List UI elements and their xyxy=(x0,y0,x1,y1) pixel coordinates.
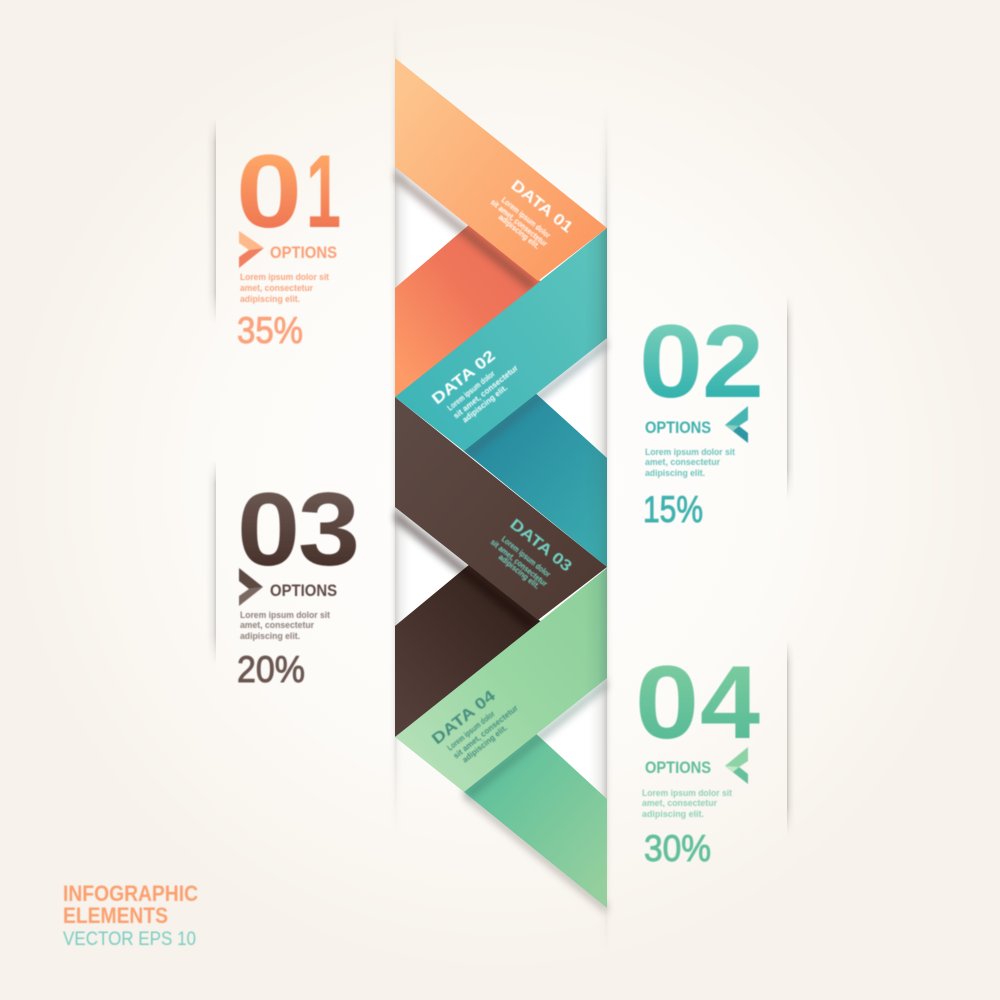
description text: adipiscing elit. xyxy=(642,808,704,819)
ribbon: brown xyxy=(395,397,607,620)
description text: Lorem ipsum dolor sit xyxy=(645,446,735,457)
number 01: 0 xyxy=(236,134,302,250)
ribbon label: data 03: DATA 03 xyxy=(506,516,575,576)
ribbon label: data 04: sit amet, consectetur xyxy=(452,703,520,761)
icon: chevron 04 xyxy=(725,747,748,784)
number 04: 4 xyxy=(700,645,760,761)
number 02: 2 xyxy=(702,304,764,420)
ribbon: dark brown fold xyxy=(395,564,545,737)
description text xyxy=(240,271,329,304)
white triangles between ribbons xyxy=(395,160,607,805)
description text xyxy=(240,609,330,641)
ribbon label: data 01: Lorem ipsum dolor xyxy=(500,196,553,240)
description text: adipiscing elit. xyxy=(240,293,300,304)
label: options: OPTIONS xyxy=(270,243,337,262)
number 04 xyxy=(635,645,760,761)
description text xyxy=(645,446,735,478)
ribbon label: data 01: DATA 01 xyxy=(507,177,576,237)
title: infographic elements xyxy=(63,881,198,950)
ribbon: light green xyxy=(395,568,607,792)
description text: Lorem ipsum dolor sit xyxy=(642,787,732,798)
ribbon label: data 04 xyxy=(429,687,520,765)
description text: amet, consectetur xyxy=(642,797,717,808)
number 03: 0 xyxy=(237,472,300,588)
ribbon label: data 03: Lorem ipsum dolor xyxy=(500,535,553,579)
panel: option 01 xyxy=(236,134,341,351)
number 01: 1 xyxy=(306,134,341,250)
ribbon label: data 01 xyxy=(489,177,576,251)
ribbon: dark green fold xyxy=(455,730,607,914)
icon: chevron 01 xyxy=(239,231,264,268)
panel: option 04 xyxy=(635,645,760,869)
number 03: 3 xyxy=(298,472,360,588)
ribbon edge shading xyxy=(585,228,607,696)
icon: chevron 02 xyxy=(725,406,748,443)
title: infographic elements: VECTOR EPS 10 xyxy=(63,928,196,950)
ribbon label: data 01: sit amet, consectetur xyxy=(489,198,550,249)
percentage: 30% xyxy=(644,828,711,869)
title: infographic elements: INFOGRAPHIC xyxy=(63,881,198,906)
ribbon label: data 03: adipiscing elit. xyxy=(497,553,541,591)
title: infographic elements: ELEMENTS xyxy=(63,903,168,928)
number 02: 0 xyxy=(639,304,703,420)
description text: amet, consectetur xyxy=(240,282,313,293)
panel: paper fold shadows xyxy=(206,15,795,955)
ribbon label: data 02 xyxy=(429,347,520,425)
description text: Lorem ipsum dolor sit xyxy=(240,609,330,620)
description text: adipiscing elit. xyxy=(240,630,300,641)
icon: chevron 03 xyxy=(239,568,263,606)
ribbon label: data 04: adipiscing elit. xyxy=(461,723,509,765)
label: options: OPTIONS xyxy=(645,418,711,437)
ribbon: teal xyxy=(395,228,607,451)
ribbon label: data 04: Lorem ipsum dolor xyxy=(446,709,497,753)
description text: amet, consectetur xyxy=(645,456,720,467)
label: options: OPTIONS xyxy=(270,581,337,600)
ribbon cast shadows xyxy=(395,170,607,799)
panel: option 03 xyxy=(237,472,360,690)
description text: amet, consectetur xyxy=(240,619,314,630)
ribbon label: data 03 xyxy=(489,516,575,591)
ribbon: dark teal fold xyxy=(455,390,607,567)
number 02 xyxy=(639,304,764,420)
percentage: 35% xyxy=(237,310,303,351)
percentage: 20% xyxy=(237,649,305,690)
description text: adipiscing elit. xyxy=(645,467,705,478)
ribbon: orange xyxy=(395,58,607,281)
ribbon label: data 02: DATA 02 xyxy=(429,347,499,408)
ribbon label: data 04: DATA 04 xyxy=(429,687,499,748)
ribbon label: data 02: adipiscing elit. xyxy=(461,383,509,425)
number 04: 0 xyxy=(635,645,699,761)
panel: option 02 xyxy=(639,304,764,530)
ribbon label: data 01: adipiscing elit. xyxy=(497,213,541,251)
description text: Lorem ipsum dolor sit xyxy=(240,271,329,282)
ribbon label: data 03: sit amet, consectetur xyxy=(489,538,550,589)
label: options: OPTIONS xyxy=(645,758,711,777)
panel: ribbon stack xyxy=(395,58,607,914)
ribbon label: data 02: sit amet, consectetur xyxy=(452,363,520,421)
number 01 xyxy=(236,134,341,250)
ribbon: red fold xyxy=(395,224,545,397)
percentage: 15% xyxy=(643,489,703,530)
ribbon label: data 02: Lorem ipsum dolor xyxy=(446,369,497,413)
number 03 xyxy=(237,472,360,588)
description text xyxy=(642,787,732,819)
